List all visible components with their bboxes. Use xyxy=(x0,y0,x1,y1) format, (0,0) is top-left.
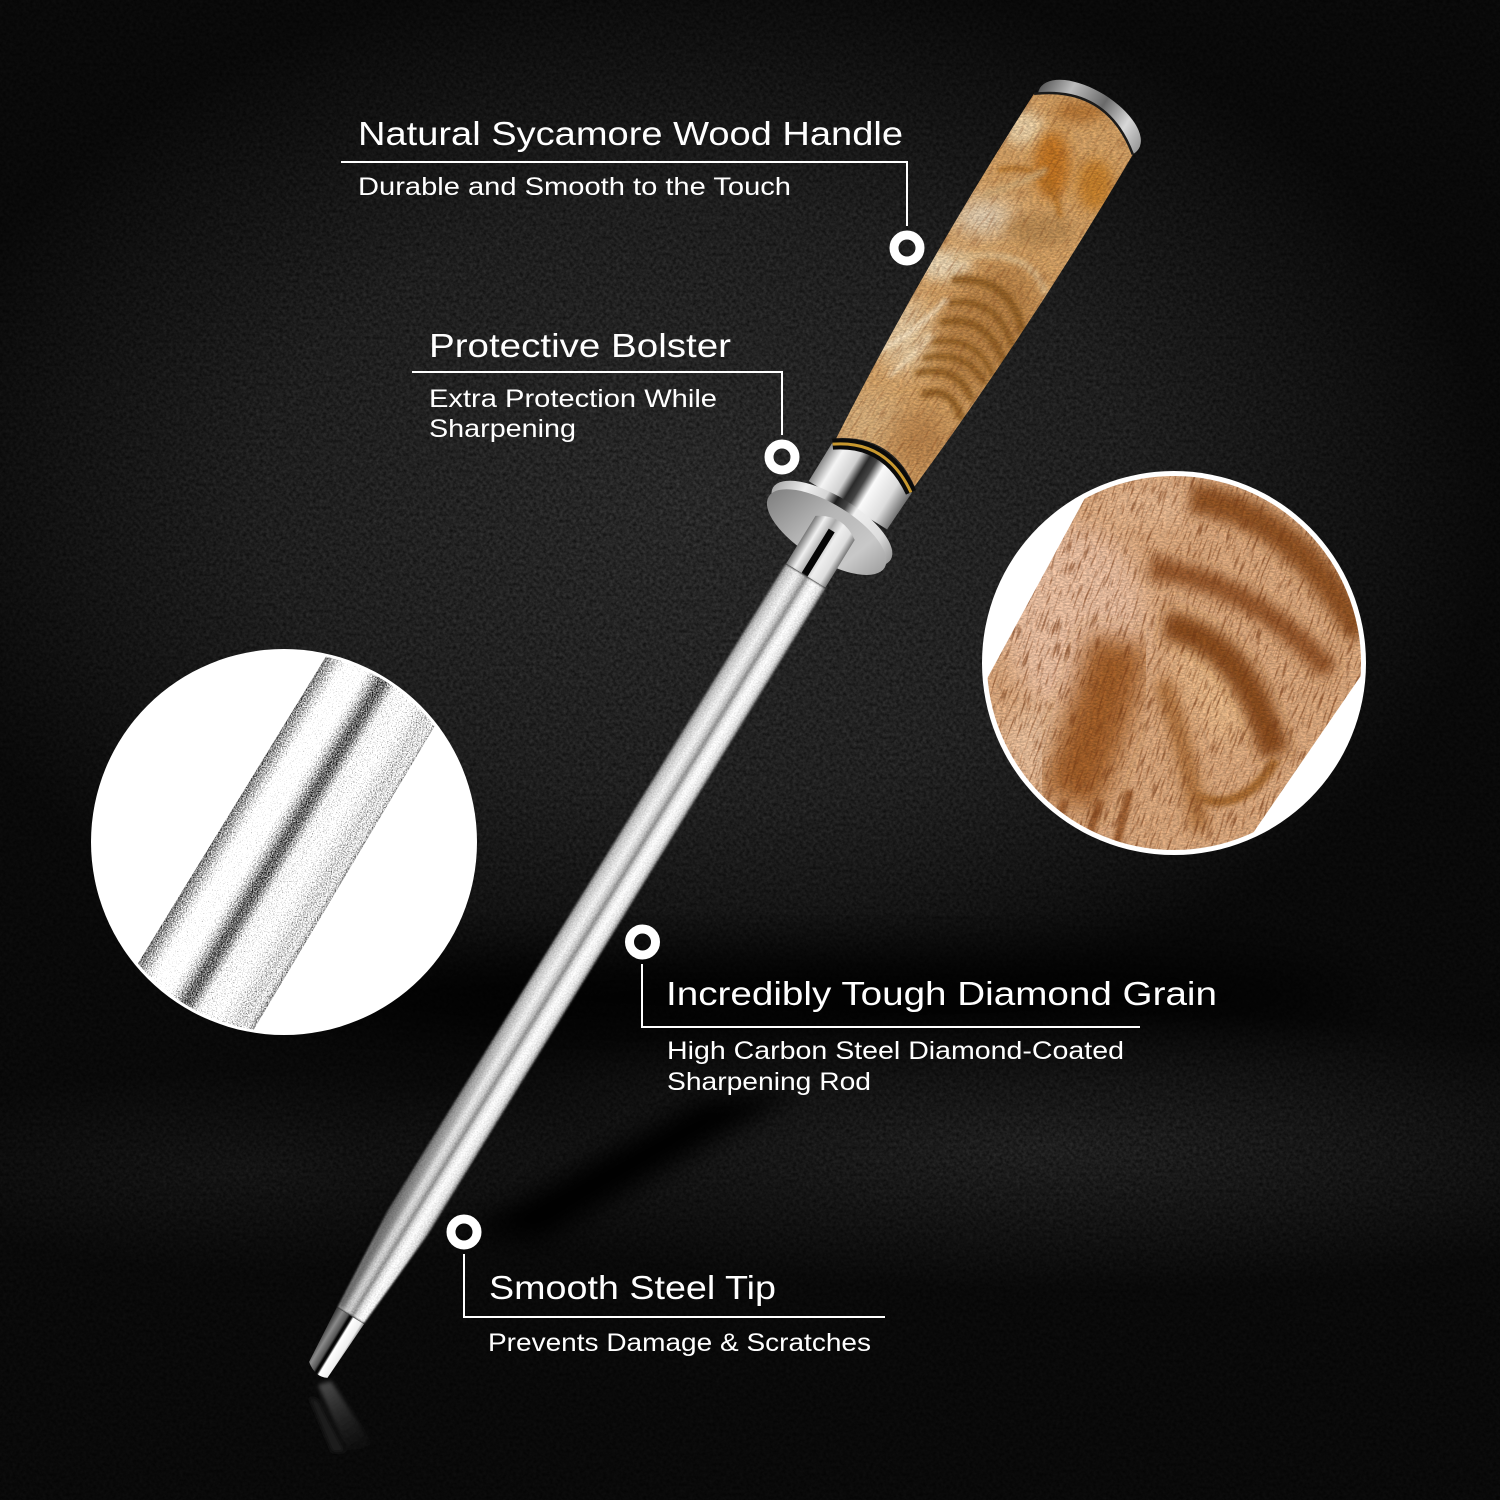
zoom circle: diamond grain close-up xyxy=(91,649,477,1035)
marker dot xyxy=(451,1219,477,1245)
handle cap shadow line xyxy=(1034,75,1145,155)
marker dot xyxy=(630,929,656,955)
brass and black rings xyxy=(833,431,919,492)
description line 2: Sharpening Rod xyxy=(667,1068,871,1096)
marker dot xyxy=(894,235,920,261)
description: Prevents Damage & Scratches xyxy=(488,1329,871,1357)
zoom circle: sycamore wood close-up xyxy=(982,471,1366,855)
description line 2: Sharpening xyxy=(429,415,576,443)
description: Extra Protection While xyxy=(429,385,717,413)
handle end cap xyxy=(1025,64,1153,173)
leader line xyxy=(341,162,907,226)
leader line xyxy=(412,372,782,435)
sharpening rod with wood handle xyxy=(309,80,1141,1452)
callout: protective bolster xyxy=(412,327,795,470)
reflection of rod tip xyxy=(309,1381,375,1452)
steel tip xyxy=(302,1307,364,1381)
callout: smooth steel tip xyxy=(451,1219,885,1357)
guard top band xyxy=(759,464,905,583)
leader line xyxy=(642,964,1140,1027)
heading: Protective Bolster xyxy=(429,327,731,364)
heading: Incredibly Tough Diamond Grain xyxy=(666,975,1217,1012)
wood handle xyxy=(836,94,1133,486)
lower rod left-edge shading xyxy=(329,980,542,1312)
guard face xyxy=(754,473,899,592)
neck slot xyxy=(801,529,835,577)
description: High Carbon Steel Diamond-Coated xyxy=(667,1037,1124,1065)
description: Durable and Smooth to the Touch xyxy=(358,173,791,201)
heading: Natural Sycamore Wood Handle xyxy=(358,115,903,152)
heading: Smooth Steel Tip xyxy=(489,1269,776,1306)
rod neck xyxy=(786,509,859,588)
leader line xyxy=(464,1254,885,1317)
callout: natural sycamore wood handle xyxy=(341,115,920,261)
callout: diamond grain xyxy=(630,929,1217,1096)
collar xyxy=(809,430,920,530)
marker dot xyxy=(769,444,795,470)
rod body xyxy=(330,563,826,1328)
